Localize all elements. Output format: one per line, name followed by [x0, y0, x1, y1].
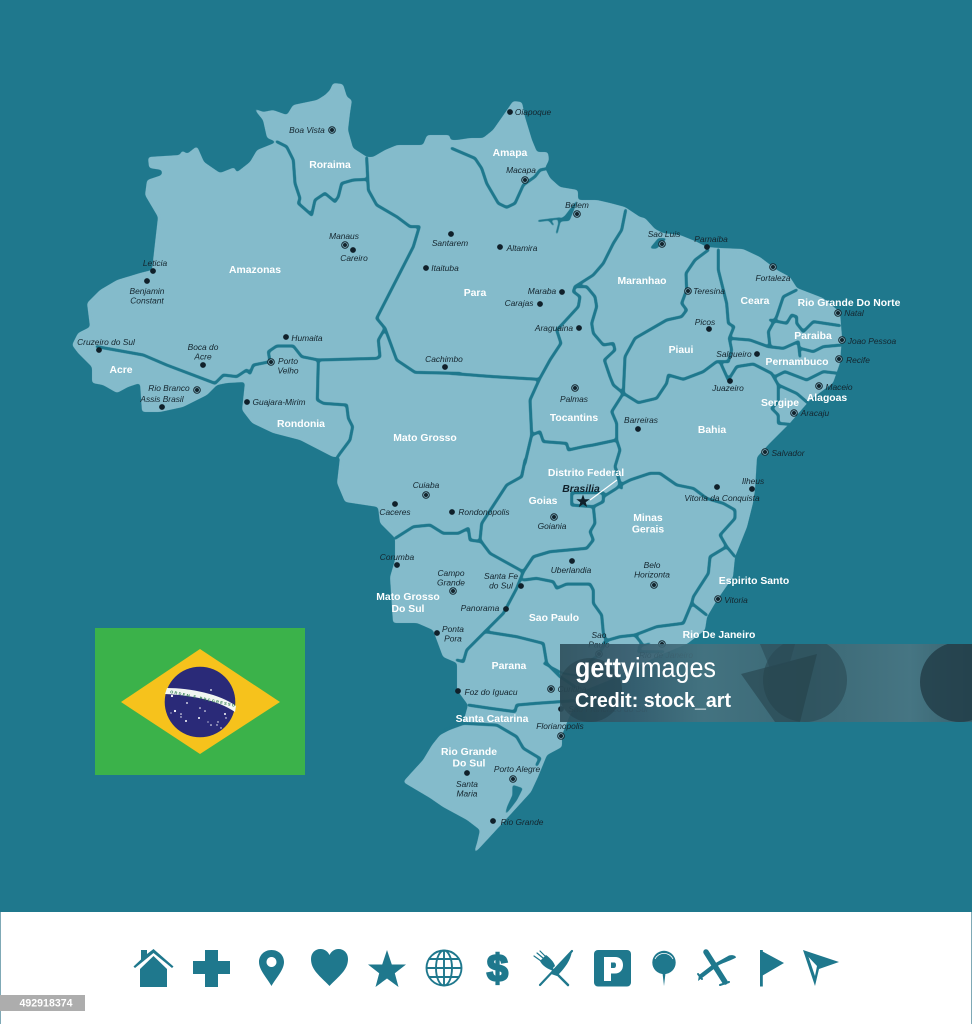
city: Cruzeiro do Sul: Cruzeiro do Sul [77, 337, 136, 347]
city: Sao Luis [648, 229, 681, 247]
city: Sao Paulo: Sao [592, 630, 606, 640]
city: Manaus [329, 231, 360, 248]
city: Porto Velho: Velho [277, 366, 299, 376]
city: Benjamin Constant: Benjamin [130, 286, 164, 296]
icon: fork and knife [534, 950, 572, 985]
city: Maraba: Maraba [528, 286, 557, 296]
flag band [165, 688, 236, 712]
state: Piaui: Piaui [669, 345, 694, 356]
icon: navigation arrow [803, 950, 839, 986]
state borders: centre and south [395, 460, 735, 815]
city: Careiro: Careiro [340, 253, 368, 263]
icon: heart [311, 949, 348, 986]
city: Palmas [560, 385, 589, 404]
city: Belo Horizonta [634, 560, 670, 588]
watermark background [560, 644, 972, 722]
city: Parnaiba [694, 234, 728, 250]
city: Salgueiro: Salgueiro [716, 349, 752, 359]
state: Amapa: Amapa [493, 148, 528, 159]
state: Sergipe: Sergipe [761, 398, 799, 409]
city: Ilheus [742, 476, 765, 492]
city: Parnaiba: Parnaiba [694, 234, 728, 244]
state: Minas Gerais: Minas [633, 513, 663, 524]
city: Recife: Recife [846, 355, 870, 365]
city: Picos: Picos [695, 317, 716, 327]
city: Itaituba: Itaituba [431, 263, 459, 273]
city: Aracaju: Aracaju [800, 408, 830, 418]
city: Ilheus: Ilheus [742, 476, 765, 486]
city: Macapa: Macapa [506, 165, 536, 175]
city: Cruzeiro do Sul [77, 337, 136, 353]
flag of Brazil [95, 628, 305, 775]
watermark abstract shapes [558, 638, 972, 722]
flag field [95, 628, 305, 775]
city: Juazeiro: Juazeiro [711, 383, 744, 393]
state borders [97, 142, 842, 815]
city: Cachimbo: Cachimbo [425, 354, 463, 364]
city: Campo Grande: Campo [438, 568, 464, 578]
city: Sao Francisco do Sul: Sao Francisco do Sul [568, 704, 649, 714]
city: Sao Paulo [588, 630, 610, 657]
city: Boca do Acre: Boca do [188, 342, 218, 352]
state: Rio De Janeiro: Rio De Janeiro [683, 630, 755, 641]
city: Leticia: Leticia [143, 258, 167, 268]
city: Benjamin Constant [130, 278, 165, 306]
city: Palmas: Palmas [560, 394, 589, 404]
city: Panorama: Panorama [461, 603, 500, 613]
city: Careiro [340, 247, 368, 263]
state: Acre: Acre [109, 365, 133, 376]
icon: map pin [259, 950, 284, 986]
city: Santa Fe do Sul [484, 571, 524, 591]
city: Rio de Janeiro [639, 641, 693, 660]
city: Santa Fe do Sul: do Sul [489, 581, 514, 591]
city: Maceio: Maceio [826, 382, 853, 392]
state: Pernambuco: Pernambuco [766, 357, 828, 368]
watermark panel [558, 638, 972, 722]
city: Vitoria da Conquista [684, 484, 760, 503]
icon: globe [426, 950, 462, 986]
city: Guajara-Mirim: Guajara-Mirim [252, 397, 306, 407]
city: Humaita: Humaita [291, 333, 323, 343]
city: Uberlandia: Uberlandia [551, 565, 592, 575]
city labels and markers [77, 107, 897, 827]
city: Porto Velho [268, 356, 299, 376]
flag stars [170, 689, 227, 729]
city: Sao Paulo: Paulo [588, 640, 610, 650]
city: Fortaleza [756, 264, 791, 283]
flag globe [165, 667, 235, 737]
city: Macapa [506, 165, 536, 183]
icon: parking [594, 950, 631, 986]
image id tag: 492918374 [19, 998, 73, 1010]
city: Campo Grande: Grande [437, 578, 465, 588]
icon: dollar: $ [487, 948, 508, 990]
city: Santa Maria [456, 770, 478, 799]
city: Natal [835, 308, 865, 318]
city: Assis Brasil [139, 394, 185, 410]
city: Santa Maria: Maria [457, 789, 478, 799]
state borders: northwest [97, 142, 460, 458]
city: Manaus: Manaus [329, 231, 360, 241]
city: Joao Pessoa: Joao Pessoa [847, 336, 897, 346]
city: Teresina: Teresina [693, 286, 725, 296]
state: Goias: Goias [529, 496, 558, 507]
watermark credit: Credit: stock_art [575, 689, 731, 712]
city: Rondonopolis: Rondonopolis [458, 507, 510, 517]
city: Fortaleza: Fortaleza [756, 273, 791, 283]
strip side edges [0, 912, 972, 1024]
city: Campo Grande [437, 568, 465, 594]
city: Brasilia [562, 484, 600, 507]
city: Altamira: Altamira [506, 243, 538, 253]
state: Rio Grande Do Sul: Do Sul [453, 758, 486, 770]
state: Amazonas: Amazonas [229, 265, 281, 276]
city: Natal: Natal [844, 308, 865, 318]
city: Vitoria da Conquista: Vitoria da Conquista [684, 493, 760, 503]
state: Minas Gerais: Gerais [632, 524, 664, 536]
city: Santa Maria: Santa [456, 779, 478, 789]
state borders: northeast [450, 148, 842, 488]
city: Caceres [379, 501, 411, 517]
city: Sao Luis: Sao Luis [648, 229, 681, 239]
icon: home [134, 949, 174, 987]
state: Distrito Federal: Distrito Federal [548, 468, 624, 479]
city: Araguaina: Araguaina [534, 323, 573, 333]
city: Santarem [432, 231, 468, 248]
state: Paraiba: Paraiba [794, 331, 832, 342]
city: Cuiaba [413, 480, 440, 498]
city: Goiania: Goiania [538, 521, 567, 531]
city: Florianopolis: Florianopolis [536, 721, 585, 731]
land outline [72, 83, 842, 855]
city: Porto Velho: Porto [278, 356, 298, 366]
city: Rio Branco: Rio Branco [148, 383, 190, 393]
city: Benjamin Constant: Constant [130, 296, 164, 306]
state: Sao Paulo: Sao Paulo [529, 613, 579, 624]
state: Maranhao: Maranhao [617, 276, 667, 287]
city: Recife [836, 355, 870, 365]
icon: plus [193, 950, 230, 987]
state: Espirito Santo: Espirito Santo [719, 576, 789, 587]
city: Rio de Janeiro: Rio de Janeiro [639, 650, 693, 660]
state: Roraima: Roraima [309, 160, 351, 171]
city: Vitoria: Vitoria [724, 595, 748, 605]
state: Rondonia: Rondonia [277, 419, 325, 430]
state: Rio Grande Do Sul: Rio Grande [441, 747, 497, 758]
city: Porto Alegre: Porto Alegre [494, 764, 540, 774]
city: Ponta Pora: Pora [444, 634, 462, 644]
city: Brasilia: Brasilia [562, 484, 600, 495]
state: Para: Para [464, 288, 486, 299]
city: Barreiras [624, 415, 659, 432]
city: Boca do Acre: Acre [193, 352, 212, 362]
city: Goiania [538, 514, 567, 531]
state: Mato Grosso: Mato Grosso [393, 433, 457, 444]
city: Cuiaba: Cuiaba [413, 480, 440, 490]
city: Carajas: Carajas [505, 298, 534, 308]
icon: golf pin [652, 951, 676, 986]
state: Santa Catarina: Santa Catarina [456, 714, 529, 725]
flag motto: ORDEM E PROGRESSO [170, 689, 235, 708]
city: Santa Fe do Sul: Santa Fe [484, 571, 518, 581]
city: Assis Brasil: Assis Brasil [139, 394, 185, 404]
strip background [0, 912, 972, 1024]
city: Boca do Acre [188, 342, 219, 368]
city: Corumba [380, 552, 415, 568]
city: Juazeiro [711, 378, 744, 393]
city: Boa Vista: Boa Vista [289, 125, 325, 135]
line: Distrito Federal pointer [590, 480, 617, 500]
state: Alagoas: Alagoas [807, 393, 847, 404]
city: Florianopolis [536, 721, 585, 739]
state: Mato Grosso Do Sul: Mato Grosso [376, 592, 440, 603]
city: Belo Horizonta: Horizonta [634, 570, 670, 580]
city: Curitiba: Curitiba [558, 684, 587, 694]
city: Cachimbo [425, 354, 463, 370]
city: Belo Horizonta: Belo [644, 560, 660, 570]
city: Picos [695, 317, 716, 332]
city: Uberlandia [551, 558, 592, 575]
city: Santarem: Santarem [432, 238, 468, 248]
icon: airplane [698, 952, 736, 985]
state: Tocantins: Tocantins [550, 413, 598, 424]
state: Rio Grande Do Norte: Rio Grande Do Norte [798, 298, 901, 309]
city: Barreiras: Barreiras [624, 415, 659, 425]
city: Porto Alegre [494, 764, 540, 782]
state: Mato Grosso Do Sul: Do Sul [392, 604, 425, 615]
icon: star [368, 950, 406, 987]
city: Salvador: Salvador [771, 448, 806, 458]
city: Belem [565, 200, 589, 217]
city: Foz do Iguacu: Foz do Iguacu [464, 687, 518, 697]
image id tag [0, 995, 85, 1011]
map of Brazil [72, 83, 901, 855]
city: Oiapoque: Oiapoque [515, 107, 551, 117]
state labels [109, 148, 901, 770]
city: Leticia [143, 258, 167, 274]
state: Parana: Parana [492, 661, 527, 672]
city: Belem: Belem [565, 200, 589, 210]
watermark logo: gettyimages [575, 652, 716, 683]
city: Caceres: Caceres [379, 507, 411, 517]
city: Ponta Pora: Ponta [442, 624, 464, 634]
bottom icon strip [0, 912, 972, 1024]
icon: flag [760, 950, 784, 986]
city: Rio Grande: Rio Grande [501, 817, 544, 827]
state: Ceara: Ceara [741, 296, 770, 307]
flag diamond [121, 649, 280, 754]
state: Bahia: Bahia [698, 425, 726, 436]
city: Ponta Pora [434, 624, 464, 644]
city: Corumba: Corumba [380, 552, 415, 562]
